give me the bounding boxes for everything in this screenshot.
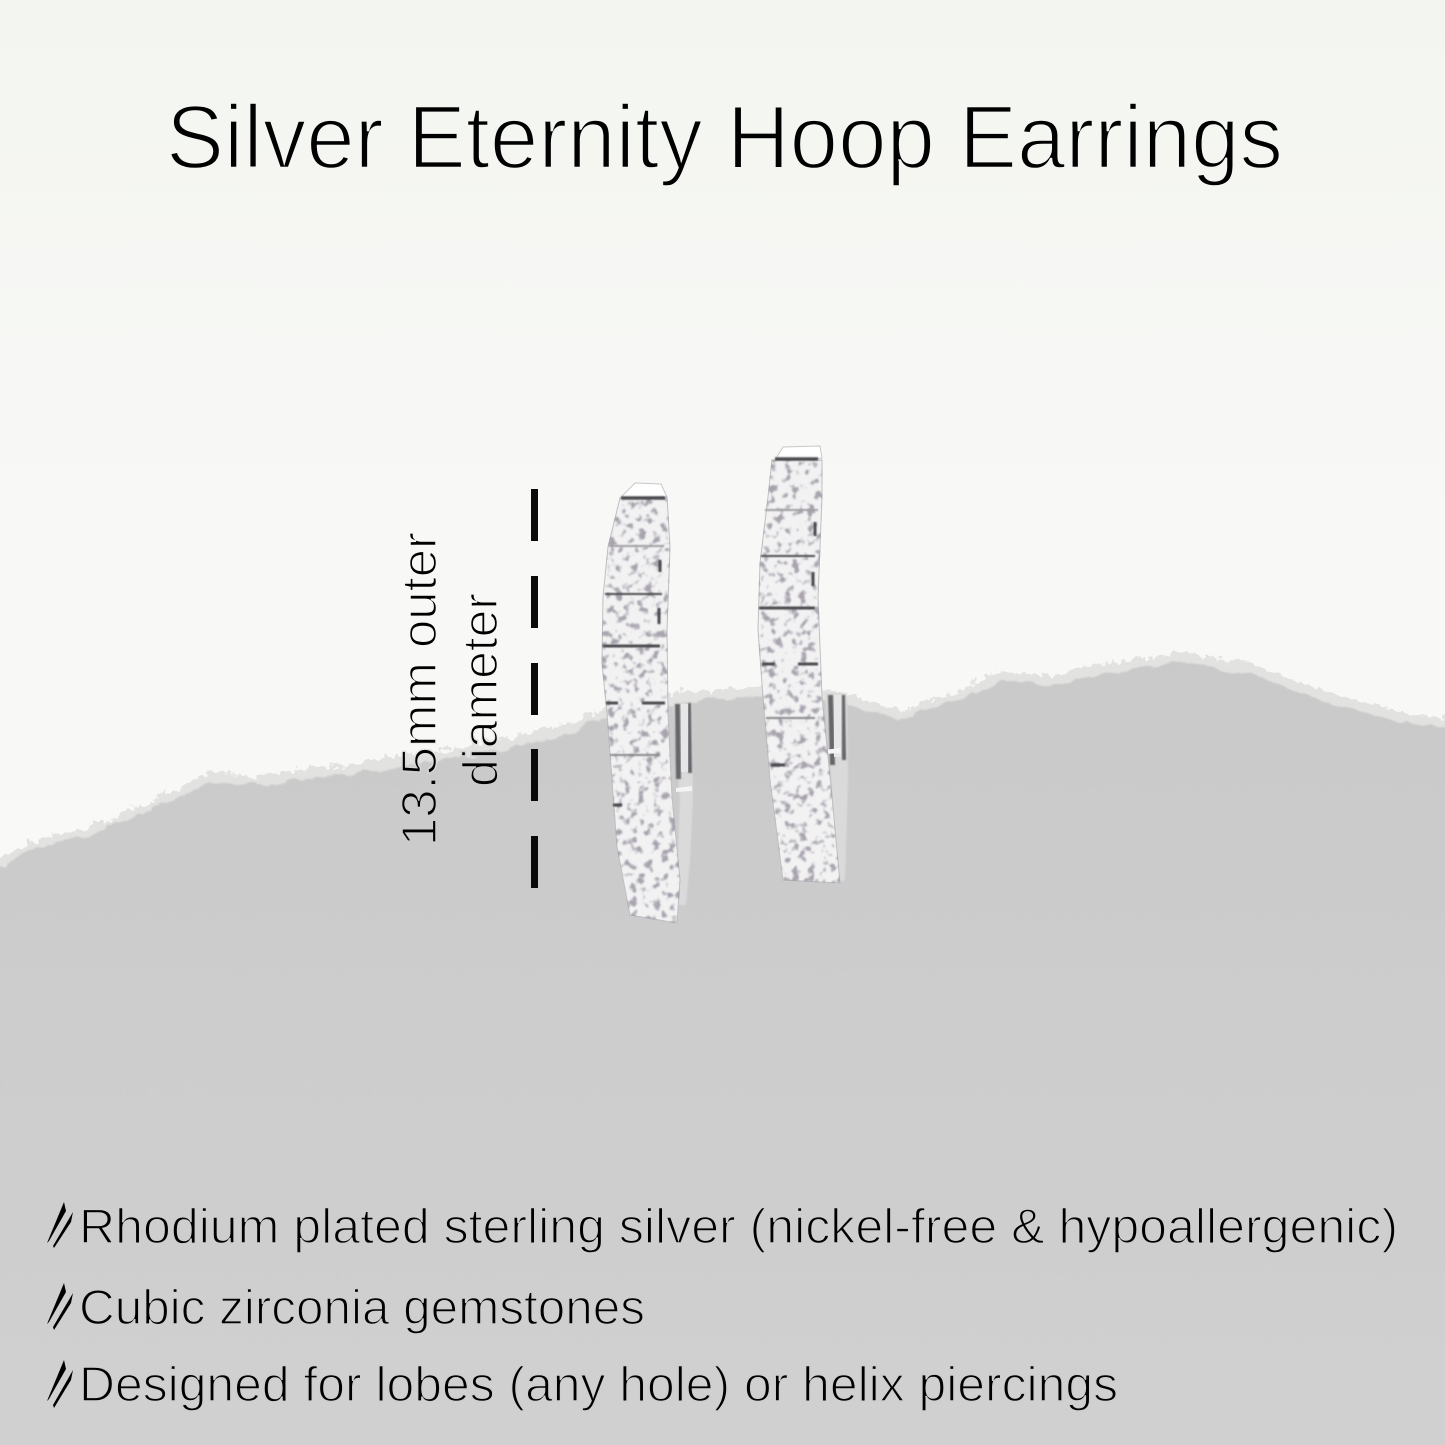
bullet 2: [47, 1281, 645, 1335]
title: Silver Eternity Hoop Earrings: [166, 88, 1283, 188]
dimension label: [393, 532, 508, 846]
dimension label: diameter: [454, 593, 508, 787]
right earring: [758, 446, 848, 884]
earrings photo: [602, 446, 848, 923]
bullet list: [47, 1200, 1398, 1412]
bullet 1: [47, 1200, 1398, 1254]
bullet text 1: Rhodium plated sterling silver (nickel-free & hypoallergenic): [79, 1200, 1398, 1254]
icon: double slash: [47, 1360, 73, 1408]
bullet text 2: Cubic zirconia gemstones: [79, 1281, 645, 1335]
icon: double slash: [47, 1202, 73, 1248]
icon: double slash: [47, 1283, 73, 1330]
bullet text 3: Designed for lobes (any hole) or helix piercings: [79, 1358, 1118, 1412]
dimension label: 13.5mm outer: [393, 532, 447, 846]
dashed measurement line: [531, 489, 538, 888]
left earring: [602, 483, 693, 923]
bullet 3: [47, 1358, 1118, 1412]
